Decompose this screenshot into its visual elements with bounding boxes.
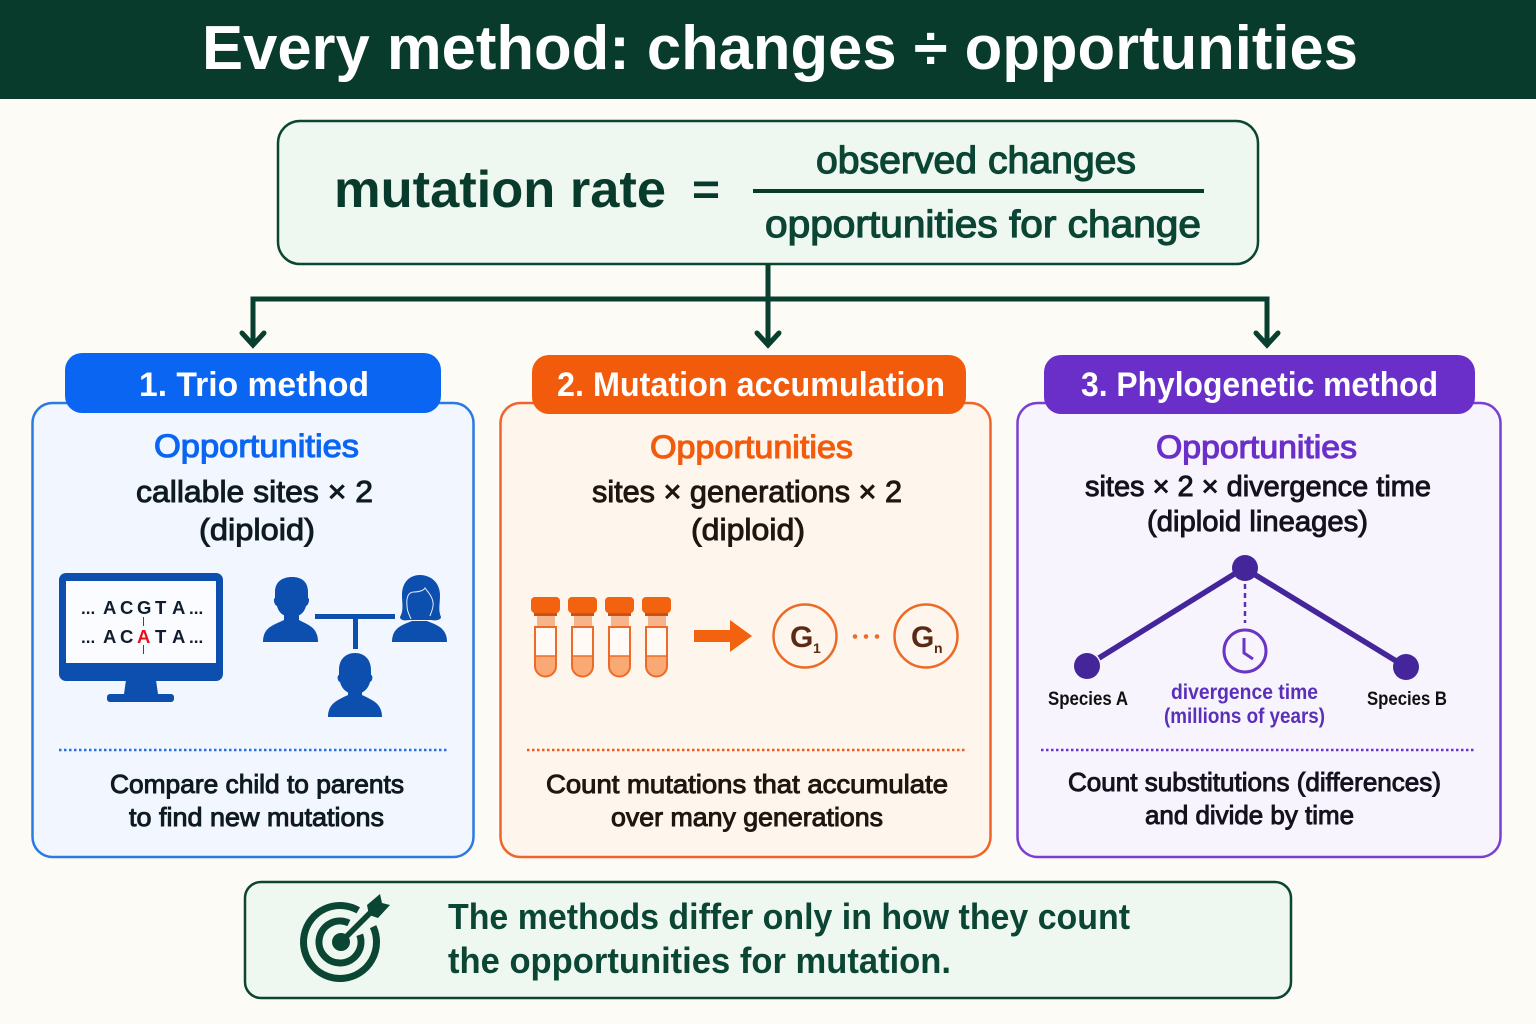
tree diagram bbox=[1048, 555, 1447, 728]
caption: trio: Compare child to parents bbox=[110, 769, 404, 799]
child bbox=[328, 653, 382, 717]
formula box: = bbox=[692, 165, 720, 214]
icon: clock bbox=[1224, 630, 1266, 672]
opportunities text: trio bbox=[136, 428, 373, 547]
panel: trio method bbox=[32, 353, 474, 857]
caption: trio bbox=[110, 769, 404, 832]
icon: target with arrow bbox=[304, 894, 390, 979]
label: divergence time bbox=[1164, 681, 1325, 728]
opportunities text: accumulation: (diploid) bbox=[691, 512, 805, 547]
icon: generation Gn bbox=[894, 604, 958, 668]
icon: generation G1 bbox=[774, 604, 836, 668]
formula box: opportunities for change bbox=[765, 204, 1201, 246]
caption: accumulation: Count mutations that accumulate bbox=[546, 769, 948, 799]
icon: generation G1: G bbox=[790, 621, 813, 654]
opportunities text: trio: callable sites × 2 bbox=[136, 474, 373, 509]
icon: monitor with DNA sequences: A bbox=[172, 626, 185, 647]
opportunities text: phylogenetic: sites × 2 × divergence time bbox=[1085, 471, 1431, 503]
caption: trio: to find new mutations bbox=[129, 802, 384, 832]
mother bbox=[392, 575, 447, 642]
opportunities text: phylogenetic: Opportunities bbox=[1156, 429, 1357, 465]
arrow: to generations bbox=[694, 620, 752, 652]
icon: monitor with DNA sequences: ... bbox=[189, 599, 203, 618]
opportunities text: trio: (diploid) bbox=[199, 512, 315, 547]
pedigree lines bbox=[315, 614, 395, 649]
caption: phylogenetic bbox=[1068, 767, 1441, 830]
opportunities text: phylogenetic: (diploid lineages) bbox=[1147, 506, 1368, 538]
icon: monitor with DNA sequences: C bbox=[120, 597, 133, 618]
opportunities text: phylogenetic bbox=[1085, 429, 1431, 538]
icon: monitor with DNA sequences: A bbox=[172, 597, 185, 618]
father bbox=[263, 577, 318, 642]
opportunities text: trio: Opportunities bbox=[154, 428, 359, 464]
icon: family pedigree bbox=[263, 575, 447, 717]
tube 2 bbox=[568, 597, 597, 676]
icon: monitor with DNA sequences: A bbox=[137, 626, 150, 647]
tab heading: trio bbox=[65, 353, 441, 413]
takeaway text bbox=[448, 896, 1130, 981]
tab heading: phylogenetic: 3. Phylogenetic method bbox=[1081, 366, 1438, 404]
caption: phylogenetic: and divide by time bbox=[1145, 800, 1354, 830]
icon: monitor with DNA sequences: ... bbox=[189, 628, 203, 647]
label: divergence time: divergence time bbox=[1171, 681, 1318, 704]
dotted divider bbox=[527, 749, 966, 751]
icon: monitor with DNA sequences: ... bbox=[81, 628, 95, 647]
label: species A: Species A bbox=[1048, 689, 1128, 710]
takeaway text: The methods differ only in how they count bbox=[448, 896, 1130, 937]
icon: monitor with DNA sequences: ... bbox=[81, 599, 95, 618]
icon: monitor with DNA sequences: T bbox=[155, 626, 167, 647]
icon: generation G1: 1 bbox=[813, 640, 821, 656]
tab heading: accumulation: 2. Mutation accumulation bbox=[557, 366, 945, 404]
icon: monitor with DNA sequences: A bbox=[103, 597, 116, 618]
caption: phylogenetic: Count substitutions (differences) bbox=[1068, 767, 1441, 797]
connector arrows bbox=[242, 264, 1278, 345]
icon: generation Gn: G bbox=[911, 621, 934, 654]
caption: accumulation: over many generations bbox=[611, 802, 883, 832]
opportunities text: accumulation bbox=[592, 429, 902, 547]
tube 4 bbox=[642, 597, 671, 676]
tab heading: trio: 1. Trio method bbox=[139, 366, 369, 404]
dotted divider bbox=[1041, 749, 1475, 751]
header banner bbox=[0, 0, 1536, 99]
ellipsis dots bbox=[853, 634, 879, 639]
icon: test tubes bbox=[531, 597, 671, 676]
icon: monitor with DNA sequences: C bbox=[120, 626, 133, 647]
panel: mutation accumulation bbox=[500, 355, 990, 857]
takeaway callout bbox=[245, 882, 1291, 998]
dotted divider bbox=[59, 749, 449, 751]
formula box bbox=[278, 121, 1258, 264]
opportunities text: accumulation: Opportunities bbox=[650, 429, 853, 465]
icon: monitor with DNA sequences: T bbox=[155, 597, 167, 618]
tube 1 bbox=[531, 597, 560, 676]
panel: phylogenetic method bbox=[1018, 355, 1500, 857]
formula box: mutation rate bbox=[334, 161, 666, 219]
tab heading: phylogenetic bbox=[1044, 355, 1475, 414]
caption: accumulation bbox=[546, 769, 948, 832]
tube 3 bbox=[605, 597, 634, 676]
icon: monitor with DNA sequences: A bbox=[103, 626, 116, 647]
label: divergence time: (millions of years) bbox=[1164, 705, 1325, 728]
icon: monitor with DNA sequences bbox=[59, 573, 223, 702]
title: Every method: changes ÷ opportunities bbox=[202, 14, 1358, 83]
tab heading: accumulation bbox=[532, 355, 966, 414]
icon: monitor with DNA sequences: G bbox=[137, 597, 151, 618]
label: species B: Species B bbox=[1367, 689, 1447, 710]
opportunities text: accumulation: sites × generations × 2 bbox=[592, 474, 902, 509]
takeaway text: the opportunities for mutation. bbox=[448, 940, 951, 981]
icon: generation Gn: n bbox=[934, 640, 943, 656]
formula box: observed changes bbox=[816, 140, 1136, 182]
